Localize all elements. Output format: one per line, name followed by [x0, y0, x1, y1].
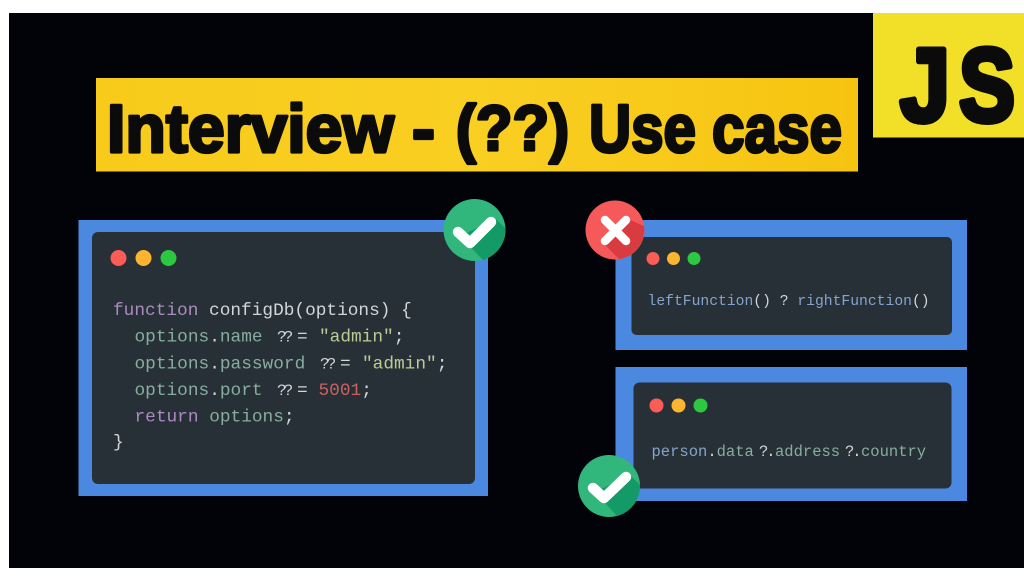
title text — [107, 91, 842, 167]
panel: ternary code window — [616, 220, 967, 350]
code block: ?? — [277, 382, 293, 400]
icon: red cross badge — [586, 200, 644, 260]
code line: ?. — [759, 443, 774, 461]
code block: 5001; — [318, 381, 372, 401]
title banner — [96, 78, 858, 172]
code block: function configDb(options) { — [113, 301, 412, 321]
code block: "admin"; — [362, 354, 447, 374]
code line — [652, 443, 926, 461]
code block: options.port — [134, 381, 263, 401]
code block: = — [340, 354, 351, 374]
code line: person.data — [652, 443, 754, 461]
code block: return options; — [134, 408, 295, 428]
code block: = — [297, 328, 308, 348]
icon: green check badge, bottom panel — [578, 455, 640, 517]
code block: ?? — [320, 356, 336, 374]
JS logo: J — [900, 28, 950, 144]
icon: green check badge, top left panel — [444, 199, 506, 261]
code block: = — [297, 381, 308, 401]
code block: } — [113, 433, 124, 453]
code block: options.name — [134, 328, 263, 348]
code block: "admin"; — [319, 328, 404, 348]
panel: optional chaining code window — [616, 367, 967, 501]
code line: country — [861, 443, 926, 461]
title text: (??) — [456, 92, 569, 164]
title text: - — [412, 91, 435, 167]
code line: leftFunction() ? rightFunction() — [648, 294, 930, 310]
window buttons — [646, 252, 700, 265]
title text: case — [712, 91, 842, 167]
window buttons — [110, 250, 176, 266]
code line: ?. — [845, 443, 860, 461]
title text: Use — [589, 91, 696, 167]
panel: configDb code window — [78, 220, 488, 496]
code block: options.password — [134, 354, 305, 374]
code block: ?? — [277, 328, 293, 346]
title text: Interview — [107, 91, 395, 167]
window buttons — [650, 398, 708, 412]
code line: address — [775, 443, 840, 461]
code block — [113, 301, 447, 453]
JS logo — [873, 13, 1024, 144]
